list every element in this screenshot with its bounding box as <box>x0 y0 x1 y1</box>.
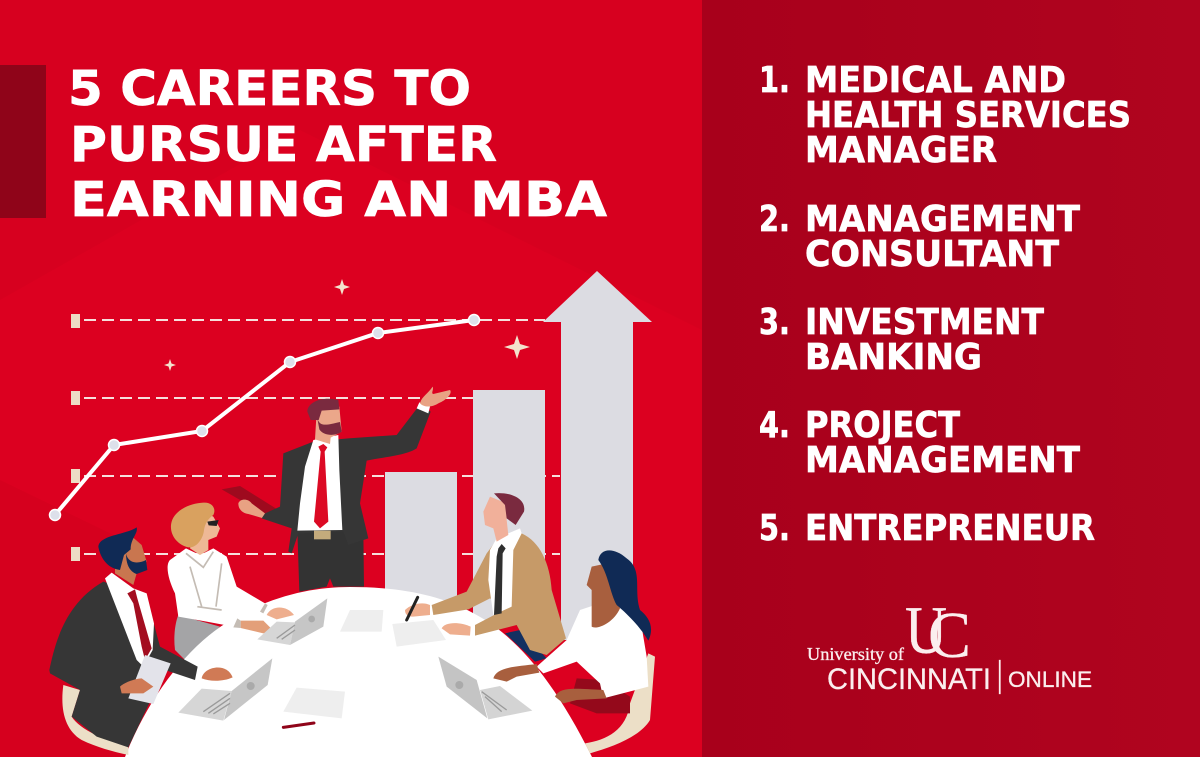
accent block beside title <box>0 65 46 218</box>
career 1: MEDICAL AND <box>805 60 1066 101</box>
career 1: HEALTH SERVICES <box>805 95 1131 136</box>
logo: University of Cincinnati Online: CINCINNATI <box>827 663 991 696</box>
career 5: ENTREPRENEUR <box>805 508 1095 549</box>
panel: right dark red background <box>702 0 1200 757</box>
icon: upward arrow bar <box>543 271 652 640</box>
career 2: 2. <box>759 199 790 240</box>
panel: left red background <box>0 0 702 757</box>
chart: growth line <box>50 314 480 520</box>
title <box>68 61 607 228</box>
career 3: BANKING <box>805 337 982 378</box>
figure: man in tan jacket <box>392 493 566 719</box>
chart: dashed grid lines <box>84 320 560 554</box>
career 1: 1. <box>759 60 790 101</box>
logo: University of Cincinnati Online: U <box>905 592 947 668</box>
laptops and papers on table <box>178 598 383 727</box>
career 1 <box>759 60 1131 171</box>
career 3 <box>759 302 1044 378</box>
career 4: 4. <box>759 405 790 446</box>
career 3: 3. <box>759 302 790 343</box>
career 2 <box>759 199 1080 275</box>
title: PURSUE AFTER <box>70 117 497 173</box>
chart: axis tick markers <box>71 314 80 561</box>
table <box>125 587 592 757</box>
career 4 <box>759 405 1080 481</box>
figure: presenter <box>222 387 451 592</box>
logo: University of Cincinnati Online: University of <box>807 644 904 664</box>
icon: sparkles <box>164 279 530 371</box>
logo: University of Cincinnati Online: ONLINE <box>1008 667 1092 692</box>
career 1: MANAGER <box>805 130 997 171</box>
list: five MBA careers <box>759 60 1131 549</box>
career 2: MANAGEMENT <box>805 199 1080 240</box>
career 5: 5. <box>759 508 790 549</box>
logo: University of Cincinnati Online <box>807 592 1092 696</box>
career 4: PROJECT <box>805 405 960 446</box>
figure: woman's forearms and hands on table <box>233 603 294 633</box>
logo: University of Cincinnati Online: C <box>928 599 971 672</box>
career 3: INVESTMENT <box>805 302 1044 343</box>
figure: man in dark suit with tablet <box>49 527 233 755</box>
chart: growth bars <box>385 390 545 620</box>
figure: woman with dark hair <box>493 550 655 753</box>
career 2: CONSULTANT <box>805 234 1059 275</box>
title: EARNING AN MBA <box>70 172 607 228</box>
title: 5 CAREERS TO <box>68 61 471 117</box>
career 4: MANAGEMENT <box>805 440 1080 481</box>
figure: woman in white blouse <box>168 503 273 660</box>
